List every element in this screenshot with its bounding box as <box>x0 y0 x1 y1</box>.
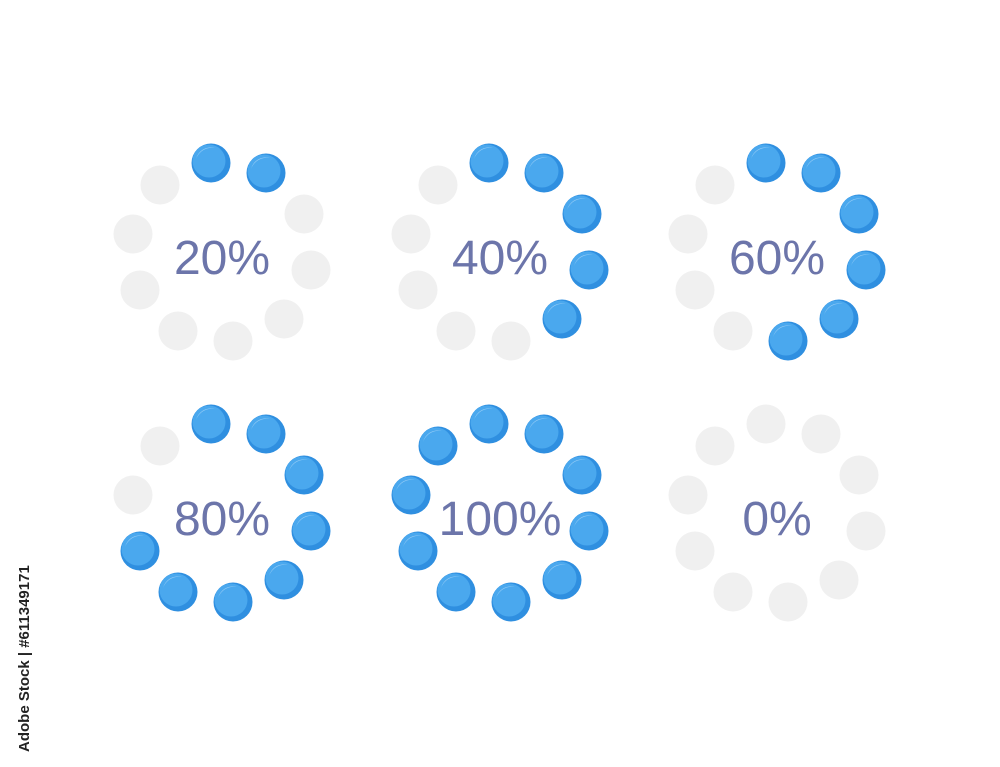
loader: 100%: 100% <box>439 493 561 546</box>
loader: 40% <box>392 144 608 360</box>
loader: 100% <box>392 404 608 622</box>
loader: 80%: 80% <box>174 493 270 546</box>
loader: 60% <box>668 144 886 360</box>
loader: 20% <box>114 144 330 360</box>
loader: 40%: 40% <box>452 232 548 285</box>
vertical stock caption: Adobe Stock | #611349171 <box>16 565 33 752</box>
loader: 20%: 20% <box>174 232 270 285</box>
loader: 60%: 60% <box>729 232 825 285</box>
loader: 0% <box>668 404 886 622</box>
loader: 0%: 0% <box>742 493 812 546</box>
loader: 80% <box>114 404 330 622</box>
